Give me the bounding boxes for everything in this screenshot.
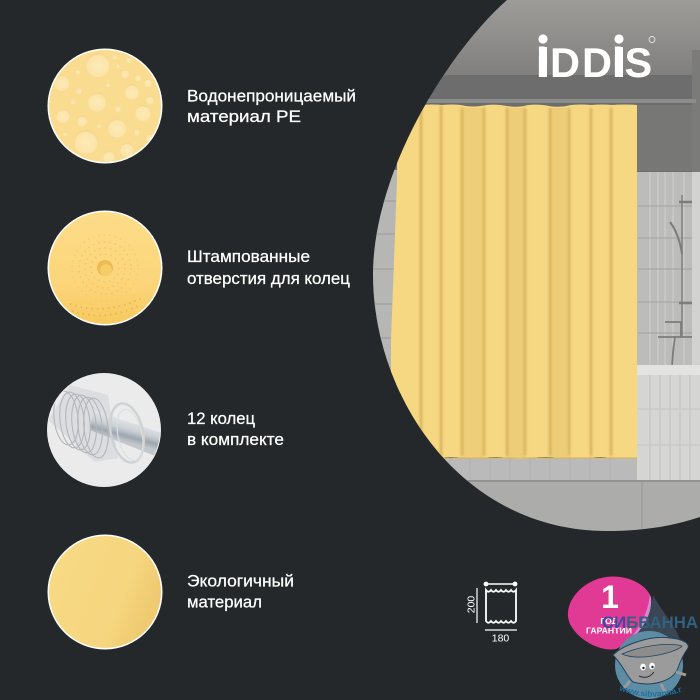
size icon: 200 x 180 curtain: 180 (492, 632, 509, 644)
feature 3 text: 12 колец (187, 410, 255, 428)
curtain (391, 104, 637, 459)
logo: iDDiS (536, 39, 652, 86)
feature 2 text line 2: отверстия для колец (187, 270, 350, 288)
watermark: sibvanna (602, 594, 698, 699)
watermark: sibvanna: www.sibvanna.ru (620, 686, 681, 697)
feature 1 icon: water drops (48, 48, 162, 164)
feature 2 text: Штампованные (187, 248, 310, 266)
feature 1 text line 2: материал PE (187, 108, 301, 126)
feature 4 text: Экологичный (187, 572, 294, 590)
shower rod (420, 99, 696, 103)
bathroom photo with curtain (360, 0, 700, 535)
shower (658, 195, 692, 372)
feature 4 text line 2: материал (187, 594, 262, 612)
size icon: 200 x 180 curtain: 200 (466, 596, 478, 613)
feature 1 text: Водонепроницаемый (187, 88, 356, 106)
warranty badge (568, 576, 651, 649)
warranty badge: 1 (601, 579, 619, 615)
feature 3 icon: rod and rings (47, 373, 165, 487)
watermark: sibvanna: СИБВАННА (602, 613, 698, 632)
warranty badge: ГАРАНТИИ (586, 626, 632, 636)
feature 2 icon: stamped hole (48, 210, 162, 326)
feature 4 icon: eco material (48, 534, 162, 650)
warranty badge: ГОД (600, 616, 618, 626)
feature 3 text line 2: в комплекте (187, 431, 284, 449)
size icon: 200 x 180 curtain (466, 582, 517, 644)
